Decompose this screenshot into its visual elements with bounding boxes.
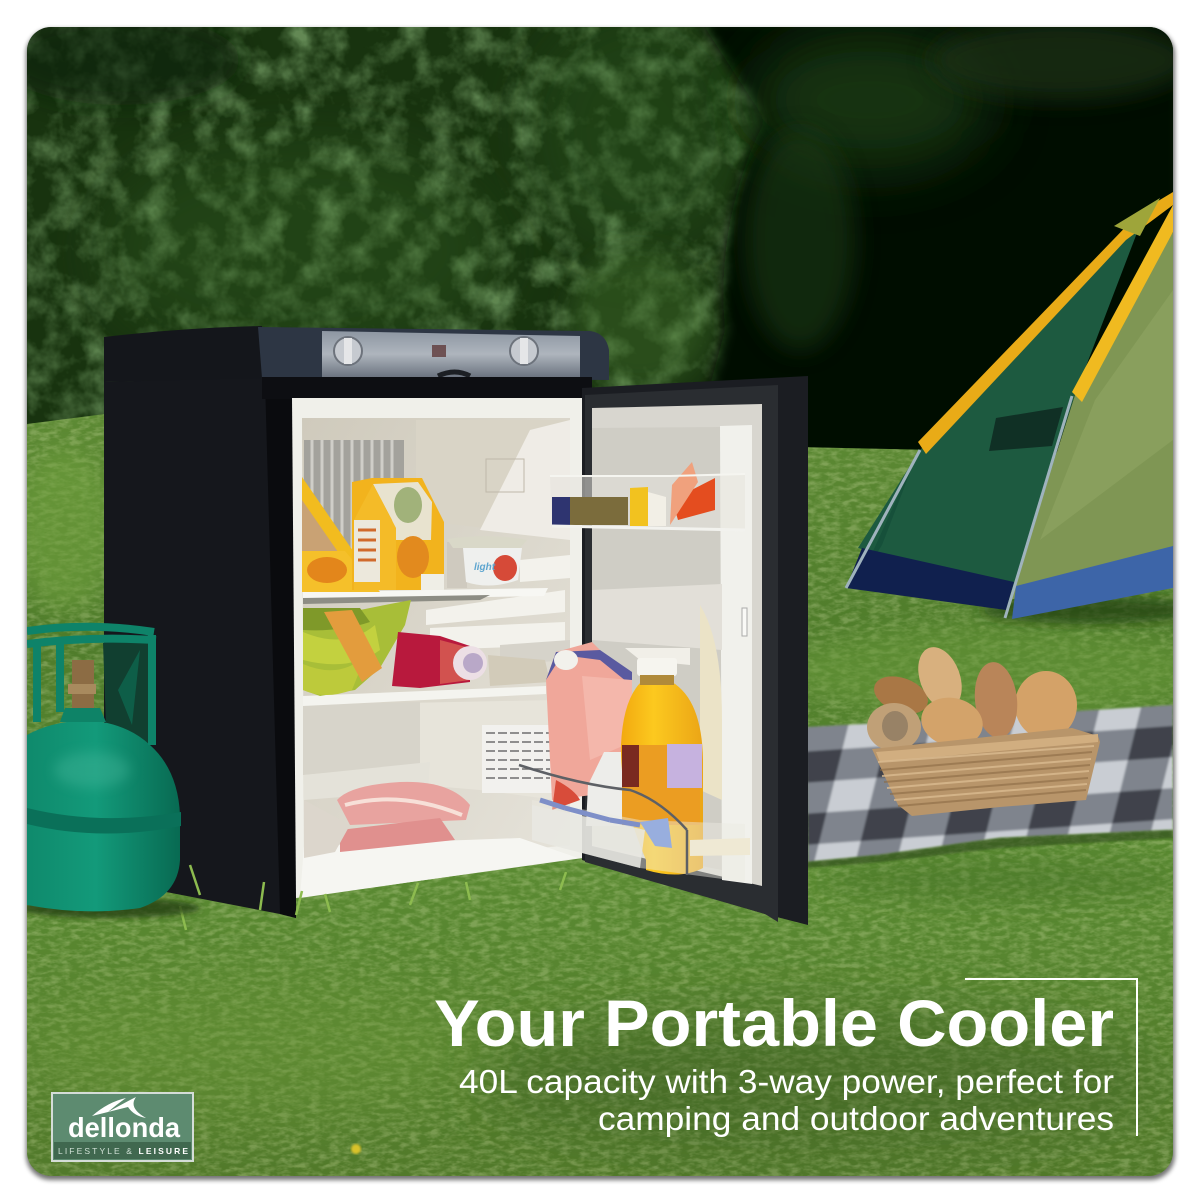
cooling fins	[304, 440, 404, 550]
fridge side	[104, 376, 296, 918]
tent blue hem	[846, 548, 1014, 610]
yoghurt pot	[447, 542, 522, 588]
cylinder body	[27, 720, 180, 911]
yoghurt pot: light	[474, 562, 496, 573]
door shelf upper	[550, 462, 745, 530]
wicker basket	[872, 728, 1100, 816]
tent left panel	[858, 234, 1136, 590]
subheading: 40L capacity with 3-way power, perfect for	[459, 1063, 1114, 1100]
milk carton	[546, 642, 632, 810]
cylinder shadow	[20, 898, 200, 918]
bread loaves	[867, 641, 1077, 752]
tent yellow stripes	[918, 192, 1173, 454]
fridge back wall	[302, 418, 570, 872]
fridge door	[582, 376, 808, 925]
door shelf lower	[519, 765, 750, 882]
logo wave	[92, 1097, 146, 1118]
small milk bottle	[586, 752, 622, 826]
fridge floor	[302, 838, 547, 898]
tent	[846, 192, 1200, 624]
spec label	[482, 725, 554, 793]
fridge lid	[104, 326, 262, 382]
middle shelf	[303, 686, 546, 706]
bottom compartment	[420, 701, 526, 789]
fridge interior frame	[292, 398, 583, 898]
cylinder valve	[72, 660, 94, 710]
bread basket	[867, 641, 1100, 816]
meat packs	[304, 782, 470, 858]
heading: Your Portable Cooler	[434, 986, 1114, 1060]
subheading: camping and outdoor adventures	[598, 1100, 1114, 1137]
grass blades over fridge base	[180, 865, 566, 930]
fridge	[104, 326, 808, 930]
picnic blanket	[806, 705, 1173, 868]
dandelion	[351, 1144, 361, 1154]
logo wordmark: dellonda	[68, 1112, 180, 1143]
triangular sandwich	[302, 477, 380, 592]
logo: dellonda	[52, 1093, 193, 1161]
sandwich box	[352, 478, 444, 590]
cylinder cage back	[103, 640, 150, 745]
frame bracket	[965, 979, 1137, 1136]
cylinder cage	[27, 627, 156, 745]
orange juice bottle	[621, 658, 703, 875]
background trees	[0, 10, 1190, 460]
tent window	[989, 407, 1063, 451]
lower shelf rails	[426, 555, 570, 665]
gas cylinder	[20, 627, 200, 918]
grass field	[10, 410, 1200, 1180]
logo tagline: LIFESTYLE & LEISURE	[58, 1146, 188, 1156]
upper shelf	[303, 588, 548, 598]
text backdrop	[480, 1010, 1160, 1150]
control knobs	[334, 337, 362, 365]
red bottle	[392, 632, 550, 688]
subheading	[459, 1063, 1114, 1137]
tent right panel	[1010, 232, 1173, 600]
bananas	[303, 600, 411, 696]
tent shadow	[980, 596, 1200, 624]
